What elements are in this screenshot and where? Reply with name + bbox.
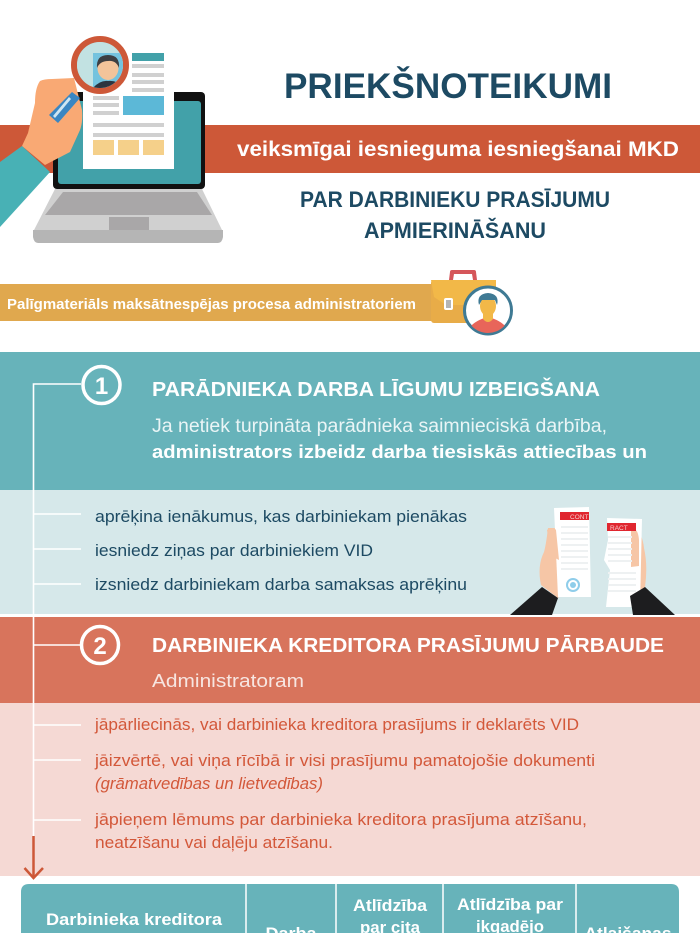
panel: step 1 list — [0, 490, 700, 614]
table header — [21, 884, 679, 933]
heading: employee claims — [300, 187, 610, 243]
label banner: material for administrators — [0, 284, 432, 321]
label banner: material for administrators: Palīgmateriāls maksātnespējas procesa administratoriem — [7, 297, 416, 313]
title: PRIEKŠNOTEIKUMI — [284, 66, 612, 106]
icon: number 2: 2 — [93, 633, 107, 660]
table header: Darbinieka kreditora — [46, 910, 223, 929]
table header: Atlīdzība par — [457, 895, 563, 914]
table header: Atlīdzība — [353, 896, 428, 915]
panel: step 1 list: aprēķina ienākumus, kas darbiniekam pienākas — [95, 508, 467, 526]
panel: step 2 header — [0, 617, 700, 703]
step 2 heading: DARBINIEKA KREDITORA PRASĪJUMU PĀRBAUDE — [152, 634, 664, 657]
icon: number 2 — [82, 626, 118, 664]
subtitle banner: veiksmīgai iesnieguma iesniegšanai MKD — [237, 138, 679, 161]
arrow — [24, 836, 43, 878]
panel: step 2 list: neatzīšanu vai daļēju atzīšanu. — [95, 834, 333, 852]
panel: step 2 list: (grāmatvedības un lietvedības) — [95, 775, 323, 793]
panel: step 1 list: izsniedz darbiniekam darba samaksas aprēķinu — [95, 576, 467, 594]
icon: hands tearing contract — [510, 507, 675, 615]
panel: step 2 list: jāpārliecinās, vai darbinieka kreditora prasījums ir deklarēts VID — [94, 716, 579, 734]
panel: step 1 header: administrators izbeidz darba tiesiskās attiecības un — [152, 441, 647, 462]
heading: employee claims: APMIERINĀŠANU — [364, 218, 546, 243]
icon: number 1 — [83, 366, 120, 404]
heading: employee claims: PAR DARBINIEKU PRASĪJUMU — [300, 187, 610, 212]
panel: step 1 list: iesniedz ziņas par darbiniekiem VID — [95, 542, 373, 560]
icon: hands tearing contract: CONT — [570, 514, 588, 521]
timeline connector — [34, 384, 81, 836]
panel: step 2 header: Administratoram — [152, 670, 304, 691]
panel: step 1 header: Ja netiek turpināta parādnieka saimnieciskā darbība, — [152, 416, 607, 437]
icon: hands tearing contract: RACT — [610, 525, 628, 532]
icon: number 1: 1 — [95, 373, 108, 400]
step 1 heading: PARĀDNIEKA DARBA LĪGUMU IZBEIGŠANA — [152, 377, 600, 401]
subtitle banner — [0, 125, 700, 173]
panel: step 2 list: jāpieņem lēmums par darbinieka kreditora prasījuma atzīšanu, — [94, 811, 587, 829]
panel: step 2 list: jāizvērtē, vai viņa rīcībā ir visi prasījumu pamatojošie dokumenti — [94, 752, 595, 770]
panel: step 1 header — [0, 352, 700, 490]
panel: step 2 list — [0, 703, 700, 876]
icon: laptop with document and magnifier — [0, 39, 223, 243]
icon: briefcase with person — [431, 270, 512, 335]
